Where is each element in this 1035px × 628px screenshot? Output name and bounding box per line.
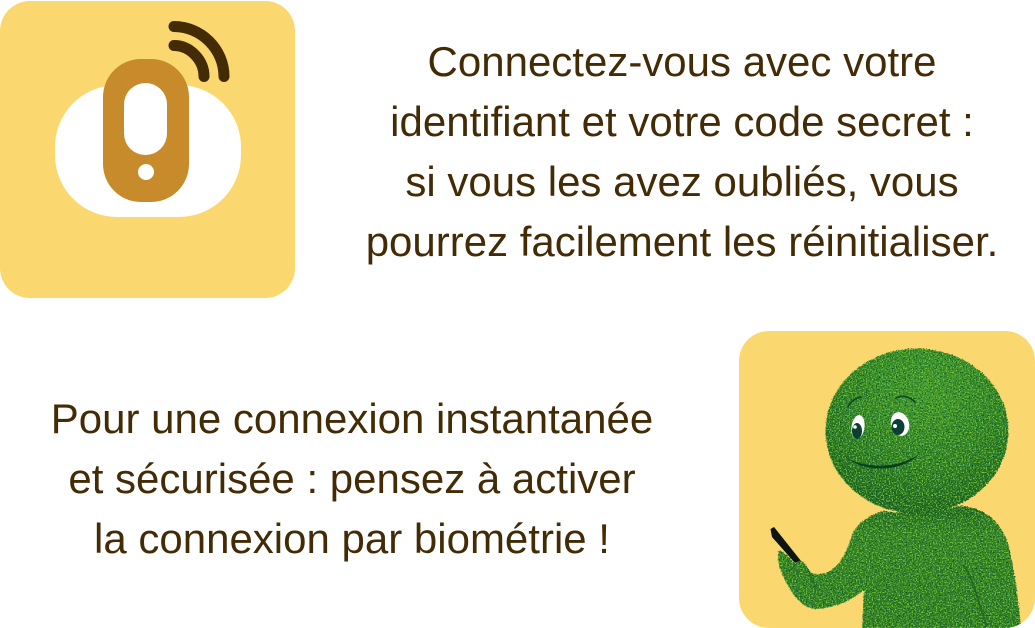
text block: login instructions: pourrez facilement les réinitialiser. (366, 218, 998, 265)
eyebrows (848, 396, 915, 407)
phone (103, 59, 189, 202)
text block: biometrics tip: et sécurisée : pensez à activer (68, 455, 636, 502)
white cloud shape (55, 85, 241, 217)
eyes (851, 412, 910, 439)
head (826, 348, 1008, 514)
text block: login instructions (366, 38, 998, 265)
phone in hand (770, 527, 809, 571)
text block: login instructions: Connectez-vous avec votre (428, 38, 936, 85)
mascot background (739, 331, 1035, 628)
mascot figure (770, 348, 1021, 628)
text block: biometrics tip: Pour une connexion instantanée (51, 395, 653, 442)
text block: login instructions: si vous les avez oubliés, vous (405, 158, 959, 205)
panel: phone signal icon (0, 1, 295, 298)
text block: biometrics tip (51, 395, 653, 562)
finger creases (787, 564, 817, 588)
body and arm (778, 506, 1021, 628)
icon background (0, 1, 295, 298)
wifi signal arcs (174, 26, 224, 76)
text block: login instructions: identifiant et votre code secret : (390, 98, 974, 145)
text block: biometrics tip: la connexion par biométrie ! (94, 515, 610, 562)
panel: green mascot with phone (739, 331, 1035, 628)
smile (848, 454, 919, 469)
arm crease (964, 565, 987, 627)
